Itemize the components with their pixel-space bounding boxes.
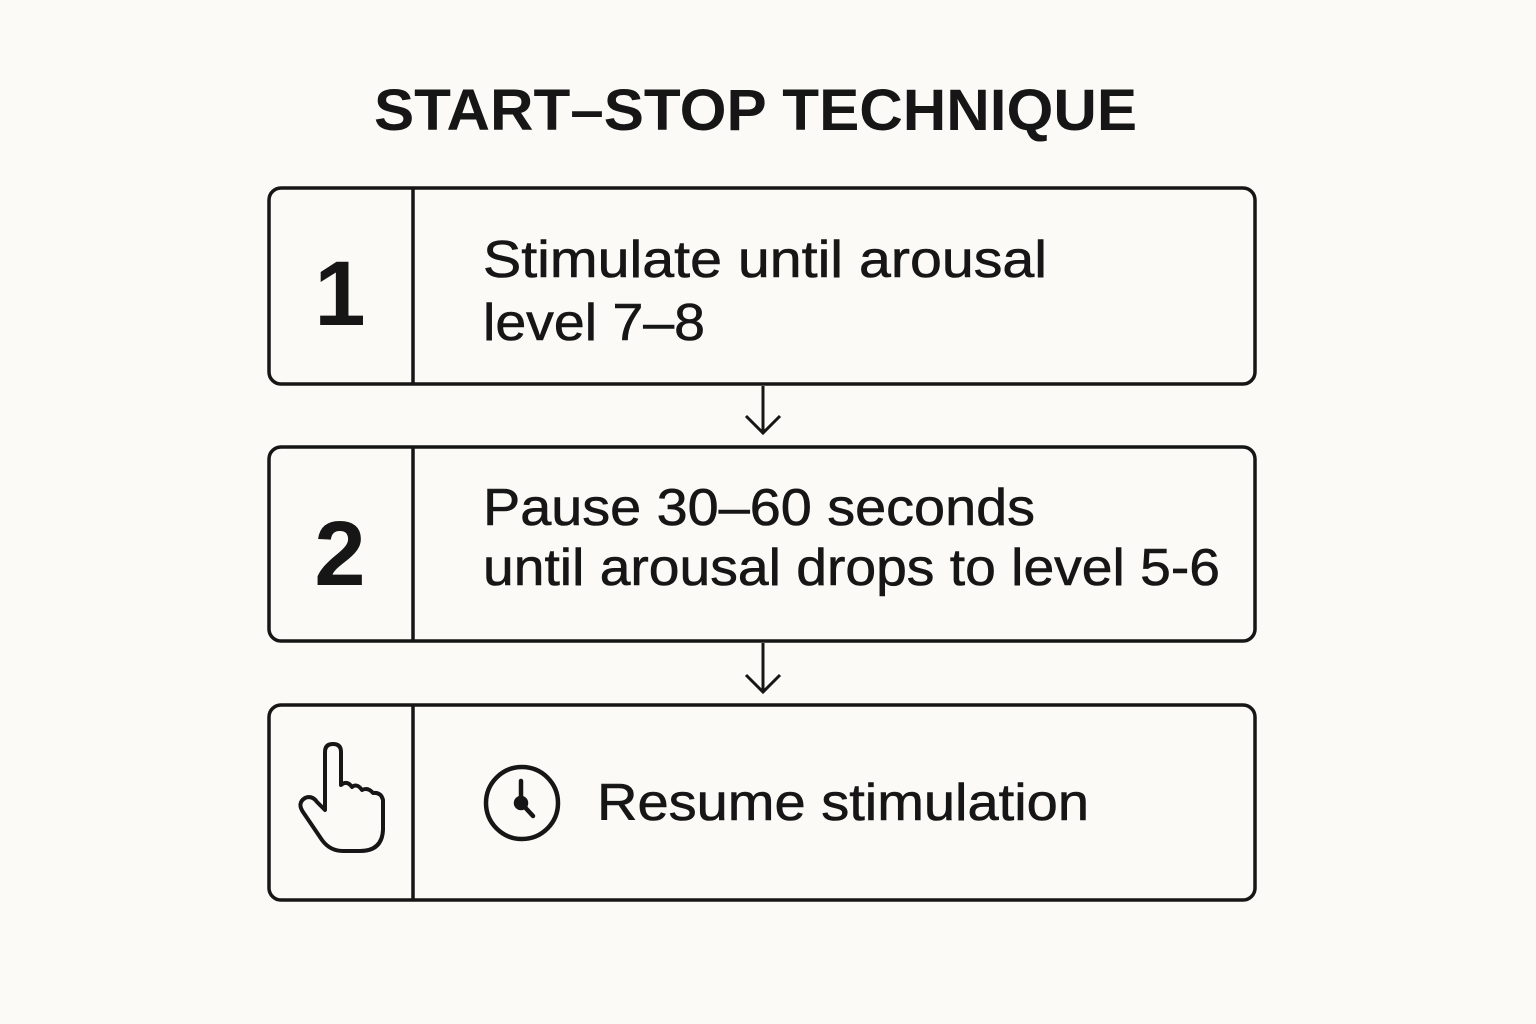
text: step 1: Stimulate until arousal bbox=[483, 231, 1047, 289]
panel: step 1 bbox=[269, 188, 1255, 384]
icon: clock bbox=[486, 767, 558, 839]
number 1: 1 bbox=[314, 243, 366, 345]
number 2: 2 bbox=[314, 503, 366, 605]
panel: step 2 bbox=[269, 447, 1255, 641]
text: step 1 bbox=[483, 231, 1047, 352]
text: step 2: Pause 30–60 seconds bbox=[483, 479, 1035, 537]
arrow 1 bbox=[746, 386, 780, 433]
text: step 2 bbox=[483, 479, 1220, 597]
icon: pointing hand bbox=[300, 744, 383, 851]
text: step 1: level 7–8 bbox=[483, 294, 705, 352]
text: step 2: until arousal drops to level 5-6 bbox=[483, 539, 1220, 597]
arrow 2 bbox=[746, 643, 780, 692]
panel: step 3 bbox=[269, 705, 1255, 900]
text: step 3: Resume stimulation bbox=[597, 774, 1089, 832]
title: START–STOP TECHNIQUE bbox=[374, 78, 1137, 143]
